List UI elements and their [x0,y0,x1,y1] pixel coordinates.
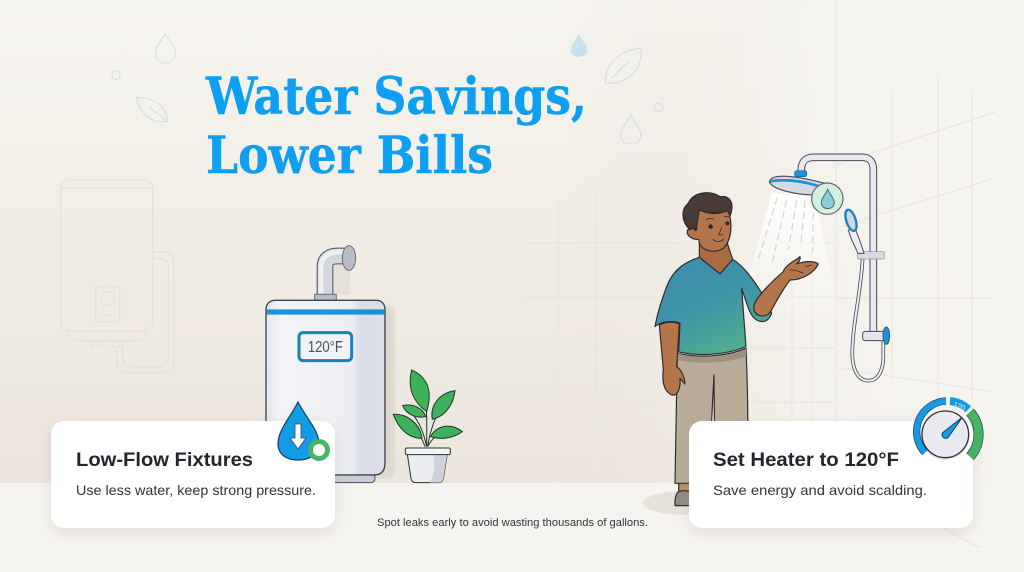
card: set heater to 120F [689,400,979,528]
decorative leaf right [605,48,642,83]
person [655,193,818,506]
flower pot [407,454,447,483]
right wall panel [560,0,1024,484]
footer note: Spot leaks early to avoid wasting thousands of gallons. [377,517,648,529]
shoe [675,491,690,506]
title: Lower Bills [206,126,493,186]
decorative leaf left [137,97,168,122]
temperature display: 120°F [308,339,343,356]
decorative drop right [621,115,641,144]
plant [393,370,462,483]
card body text: Save energy and avoid scalding. [713,482,927,498]
head [687,208,731,251]
floor shadow under person [643,491,727,515]
water drop badge [812,183,843,214]
shower head [769,171,825,195]
hose [852,257,883,381]
temperature display [299,333,352,361]
shirt [655,257,772,355]
face details [709,225,712,228]
ghost water heater illustration [61,180,174,373]
ankle [679,482,690,493]
card heading: Set Heater to 120°F [713,449,899,471]
water heater [266,246,395,483]
decorative drop left [155,34,175,63]
tank body [266,300,385,475]
shower spray [737,193,840,320]
floor [0,483,1024,572]
trousers [675,348,748,487]
hair [683,193,732,231]
decorative solid drop [571,34,587,57]
icon: temperature gauge [917,400,979,460]
decorative bubble right [655,103,663,112]
decorative water drops, leaves and bubbles [112,34,663,144]
card heading: Low-Flow Fixtures [76,449,253,471]
icon: temperature gauge: 120 [952,400,967,413]
valve knob [863,327,890,344]
lowered arm [659,322,685,395]
shower fixture [769,157,890,381]
hand shower [843,208,864,253]
neck [699,240,733,274]
pipe [315,246,356,301]
shower rail [801,157,873,337]
decorative bubble left [112,71,120,79]
title: Water Savings, [205,67,587,127]
background tile lines [523,0,995,548]
card: low-flow fixtures [51,402,335,528]
card body text: Use less water, keep strong pressure. [76,482,316,498]
slide bar holder [858,252,884,259]
raised arm [754,257,818,316]
title [205,67,587,186]
icon: water drop with down arrow [278,402,328,460]
